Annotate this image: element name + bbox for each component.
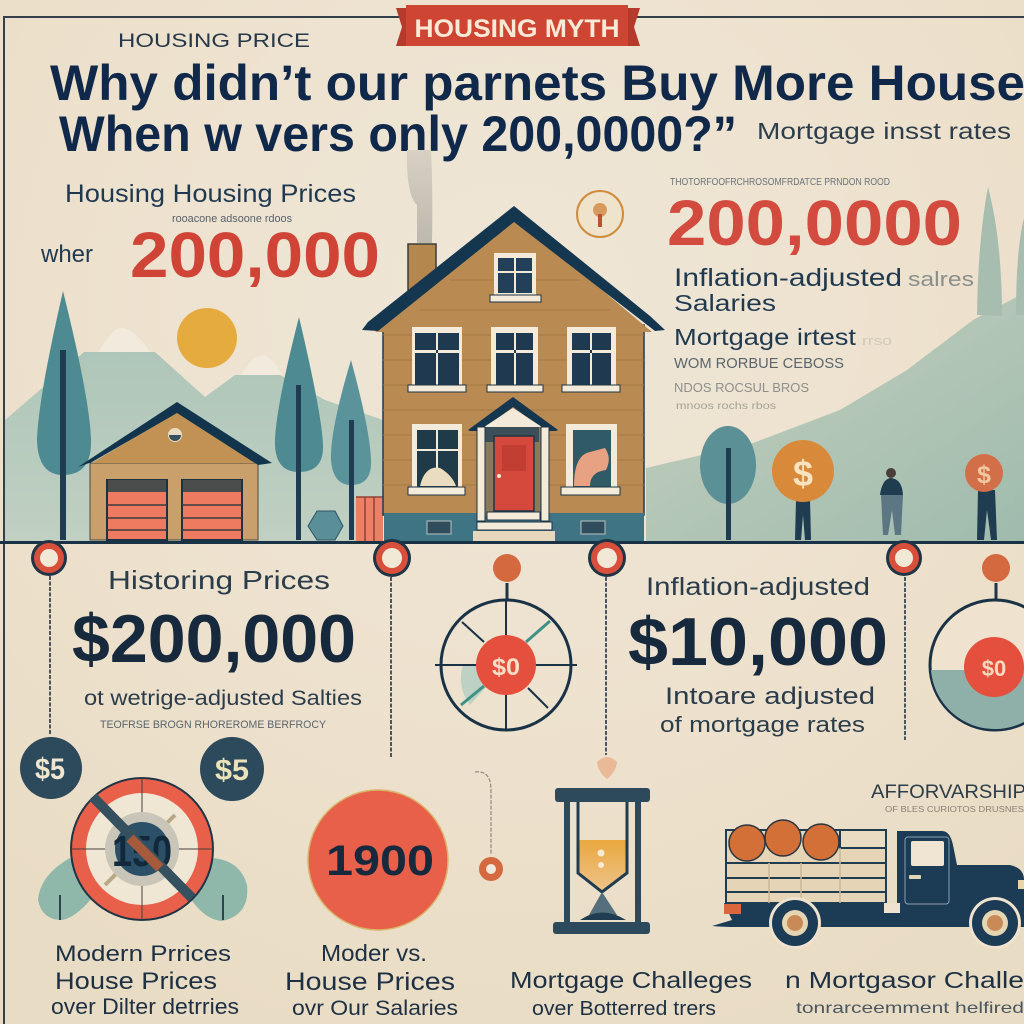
house: [362, 206, 665, 541]
caption 3: Mortgage Challeges: [510, 967, 752, 993]
text block: housing prices left: Housing Housing Prices: [65, 180, 356, 208]
text block: inflation-adjusted: [628, 573, 888, 737]
caption 4: [785, 967, 1024, 1017]
text block: housing prices left: 200,000: [130, 219, 380, 291]
caption 1: House Prices: [55, 968, 217, 995]
gauge 1: $0: [492, 654, 520, 681]
trees: [37, 291, 756, 540]
divider line: [0, 541, 1024, 544]
circle badge: 1900: [308, 790, 448, 930]
text block: prices right: THOTORFOOFRCHROSOMFRDATCE PRNDON ROOD: [670, 177, 890, 188]
banner: housing myth: HOUSING MYTH: [414, 15, 620, 43]
caption 3: [510, 967, 752, 1020]
caption 4: n Mortgasor Challe: [785, 967, 1024, 993]
title: When w vers only 200,0000?”: [59, 106, 737, 162]
dollar badges: [20, 737, 264, 801]
gauge 2: [930, 600, 1024, 730]
basement vents: [427, 521, 605, 534]
text block: prices right: mnoos rochs rbos: [676, 401, 776, 412]
fence: [356, 497, 383, 541]
coins and figures: $: [977, 461, 991, 489]
caption 1: Modern Prrices: [55, 941, 231, 966]
circle badge: 1900: 1900: [326, 837, 434, 885]
caption 1: over Dilter detrries: [51, 994, 239, 1019]
caption 1: [51, 941, 239, 1019]
prohibition target icon: 150: [112, 827, 172, 876]
text block: historing prices: ot wetrige-adjusted Salties: [84, 687, 362, 710]
prohibition target icon: [38, 777, 247, 921]
text block: prices right: Inflation-adjusted: [674, 264, 902, 292]
text block: historing prices: $200,000: [72, 601, 356, 677]
garage: [78, 402, 272, 540]
text block: inflation-adjusted: of mortgage rates: [660, 712, 865, 737]
banner: housing myth: [396, 5, 640, 46]
text: affordability: AFFORVARSHIP: [871, 782, 1024, 803]
text block: prices right: Salaries: [674, 290, 776, 316]
gauge 2: $0: [982, 656, 1006, 681]
text block: prices right: salres: [908, 269, 974, 291]
caption 4: tonrarceemment helfired: [796, 1000, 1024, 1017]
text block: inflation-adjusted: $10,000: [628, 604, 888, 680]
title: Why didn’t our parnets Buy More House: [50, 55, 1024, 111]
top window: [490, 253, 541, 302]
text block: inflation-adjusted: Inflation-adjusted: [646, 573, 870, 601]
text block: prices right: 200,0000: [667, 187, 962, 259]
text: affordability: [871, 782, 1024, 814]
gauge 1: [435, 600, 577, 730]
landscape backdrop: [5, 150, 1024, 541]
caption 3: over Botterred trers: [532, 998, 716, 1020]
text block: prices right: Mortgage irtest: [674, 324, 857, 350]
dollar badges: $5: [35, 753, 65, 786]
caption 2: Moder vs.: [321, 940, 427, 966]
kicker: housing price: HOUSING PRICE: [118, 31, 310, 52]
text block: historing prices: Historing Prices: [108, 565, 330, 595]
text: mortgage rates: Mortgage insst rates: [757, 118, 1011, 144]
text block: housing prices left: wher: [40, 241, 93, 268]
text block: prices right: [667, 177, 974, 412]
text block: historing prices: [72, 565, 362, 731]
icon: truck: [712, 820, 1024, 949]
text block: historing prices: TEOFRSE BROGN RHOREROME BERFROCY: [100, 719, 327, 731]
caption 2: ovr Our Salaries: [292, 997, 458, 1020]
text block: housing prices left: [40, 180, 380, 291]
coins and figures: [772, 440, 1003, 540]
caption 2: House Prices: [285, 968, 455, 996]
dollar badges: $5: [215, 754, 249, 787]
title: [50, 55, 1024, 162]
text block: prices right: NDOS ROCSUL BROS: [674, 380, 809, 395]
text block: inflation-adjusted: Intoare adjusted: [665, 683, 875, 710]
text block: housing prices left: rooacone adsoone rdoos: [172, 213, 292, 225]
timeline connectors: [50, 576, 905, 855]
icon: keyhole coin: [577, 191, 623, 237]
door and porch: [468, 397, 558, 541]
caption 2: [285, 940, 458, 1020]
timeline markers: [31, 539, 922, 577]
icon: hourglass: [553, 788, 650, 934]
text: affordability: OF BLES CURIOTOS DRUSNES: [885, 805, 1024, 814]
text block: prices right: WOM RORBUE CEBOSS: [674, 355, 844, 372]
coins and figures: $: [793, 453, 813, 494]
lower windows: [408, 424, 620, 495]
icon: sun: [177, 308, 237, 368]
middle windows: [408, 327, 620, 392]
small orange pins: [479, 554, 1010, 881]
text block: prices right: rrso: [862, 333, 892, 348]
